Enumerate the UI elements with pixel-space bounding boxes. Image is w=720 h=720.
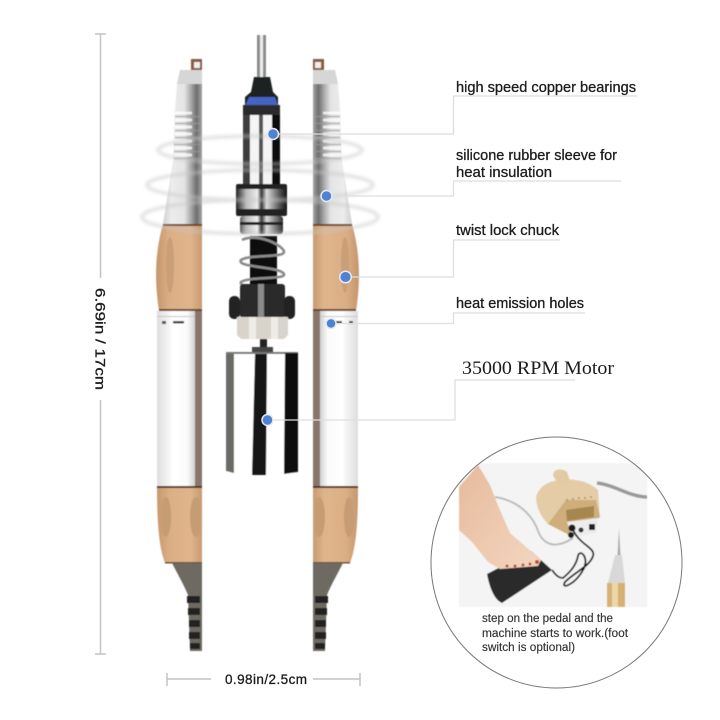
- leader lines: [267, 96, 637, 420]
- inset ring: [431, 437, 682, 688]
- exploded internals: [226, 35, 298, 475]
- toenails: [506, 560, 539, 568]
- white cap: [237, 317, 288, 339]
- inset caption: machine starts to work.(foot: [482, 628, 629, 640]
- motor magnet: [226, 352, 298, 475]
- motor post: [252, 339, 273, 354]
- foot pedal: [487, 551, 552, 603]
- right pen, half view: [313, 59, 359, 651]
- spring and core: [241, 236, 284, 294]
- foot: [459, 465, 541, 569]
- dimension: overall length: 6.69in / 17cm: [92, 288, 108, 390]
- foot switch inset: [431, 437, 682, 688]
- label: copper bearings: high speed copper bearings: [456, 80, 636, 96]
- label: silicone sleeve: heat insulation: [456, 165, 552, 181]
- callout dots: [262, 128, 351, 426]
- dimension: width: 0.98in/2.5cm: [225, 672, 307, 687]
- label: heat emission holes: heat emission holes: [456, 296, 584, 312]
- label: motor: 35000 RPM Motor: [462, 359, 614, 379]
- machine cable: [495, 497, 573, 545]
- pedal cord: [552, 530, 593, 586]
- inset photo: [459, 463, 647, 607]
- left pen, half view: [156, 59, 202, 651]
- needle shaft: [257, 35, 266, 78]
- chuck collar: [236, 184, 287, 234]
- machine body: [536, 469, 600, 538]
- inset caption: step on the pedal and the: [482, 613, 613, 625]
- dimension: width: [167, 672, 360, 687]
- inset caption: [482, 613, 629, 654]
- handpiece cord: [597, 483, 647, 497]
- heat rings: [142, 136, 378, 234]
- label: silicone sleeve: silicone rubber sleeve for: [456, 148, 617, 164]
- nose cap: [245, 77, 278, 108]
- inset caption: switch is optional): [482, 642, 575, 654]
- blue band: [245, 97, 278, 106]
- knob base: [229, 284, 295, 319]
- handpiece: [607, 528, 625, 607]
- dimension: overall length: [92, 34, 108, 654]
- label: twist lock chuck: twist lock chuck: [456, 223, 560, 239]
- label: silicone sleeve: [456, 148, 617, 181]
- spindle body: [243, 105, 280, 184]
- infographic canvas: [95, 33, 682, 688]
